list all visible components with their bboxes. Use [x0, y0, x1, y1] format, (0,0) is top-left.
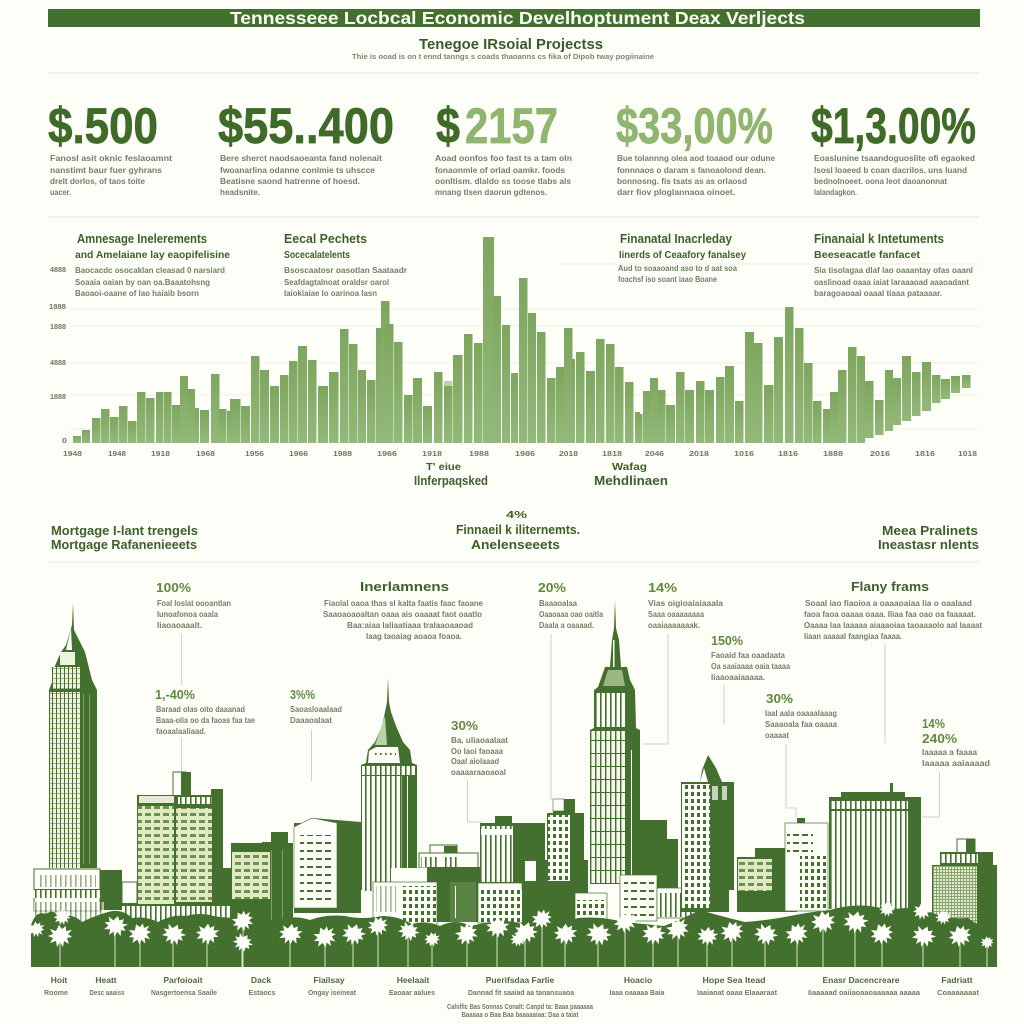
- section heading: left: Mortgage I-lant trengels: [51, 524, 198, 538]
- section heading: right: [878, 524, 979, 552]
- callout: 100%: Foal loslat oooantlan: [157, 599, 231, 608]
- bottom label: Hoacio: Hoacio: [624, 975, 652, 985]
- x axis labels: 1956: [245, 449, 264, 458]
- stat block 2: headsnite.: [220, 188, 260, 197]
- chart gridlines and y axis labels: 1888: [49, 302, 66, 311]
- subtitle: Thie is ooad is on t ennd tanngs s coads thaoanns cs fika of Dipob tway pogiinaine: [352, 52, 654, 61]
- x axis labels: 1816: [915, 449, 935, 458]
- chart gridlines and y axis labels: 0: [62, 436, 67, 445]
- chart gridlines and y axis labels: 4888: [50, 265, 66, 274]
- bottom label: Fiailsay: Ongay iseineat: [308, 988, 356, 997]
- x axis labels: 1016: [734, 449, 754, 458]
- bottom label: Heatt: Heatt: [95, 975, 117, 985]
- callout: 20%: Daala a oaaaad.: [539, 621, 594, 630]
- stat block 3: $: [436, 98, 460, 154]
- bottom label: Hope Sea Itead: [697, 975, 777, 997]
- section heading: left: [51, 524, 198, 552]
- bottom label: Puerifsdaa Farlie: Puerifsdaa Farlie: [486, 975, 555, 985]
- x axis labels: 2016: [870, 449, 890, 458]
- stat block 2: [218, 98, 394, 197]
- x axis labels: 1986: [515, 449, 535, 458]
- bottom label: Heelaait: Eaoaar aalues: [389, 988, 435, 997]
- palm trees: [28, 902, 994, 967]
- bottom label: Fiailsay: [308, 975, 356, 997]
- bottom label: Parfoioait: Parfoioait: [163, 975, 203, 985]
- building: setback tower: [681, 755, 734, 912]
- stat block 4: [616, 98, 776, 197]
- bottom label: Hope Sea Itead: Iaaiaoat oaaa Elaaaraat: [697, 988, 777, 997]
- stat block 5: $1,3.00%: [811, 98, 976, 154]
- callout: Inerlamnens: Inerlamnens: [360, 580, 449, 594]
- building: centre block: [478, 816, 588, 926]
- x axis labels: 1968: [196, 449, 215, 458]
- callout: Flany frams: Flany frams: [851, 580, 929, 594]
- callout: 30% left: Ba. uliaoaalaat: [451, 736, 508, 745]
- chart annotation: right: Mehdlinaen: [594, 473, 668, 488]
- bottom label: Heatt: [90, 975, 124, 997]
- callout: 30% right: Iaal aala oaaaalaaag: [765, 709, 837, 718]
- bottom label: Enasr Dacencreare: Enasr Dacencreare: [822, 975, 900, 985]
- callout: 30% right: 30%: [766, 691, 793, 706]
- callout: 1,-40%: [155, 687, 255, 772]
- bottom label: Enasr Dacencreare: [808, 975, 921, 997]
- callout: Flany frams: Iiaan aaaaal faangiaa faaaa.: [804, 632, 902, 641]
- callout: 150%: 150%: [711, 633, 743, 648]
- callout: 150%: Iiaaoaaiaaaaa.: [711, 673, 765, 682]
- chart caption 4: oaslinoad oaaa iaiat laraaaoad aaaoadant: [814, 278, 969, 287]
- callout: Inerlamnens: [323, 580, 484, 641]
- callout: 14%: Saaa oaaaaaaaa: [648, 610, 704, 619]
- callout: 30% left: Oaal aiolaaad: [451, 757, 499, 766]
- bottom label: Parfoioait: [151, 975, 217, 997]
- chart annotation: left: T' eiue: [426, 461, 461, 473]
- x axis labels: 1966: [377, 449, 397, 458]
- x axis labels: 1948: [63, 449, 82, 458]
- callout: Flany frams: [804, 580, 982, 743]
- bottom label: Hoit: Hoit: [51, 975, 67, 985]
- chart gridlines and y axis labels: [49, 264, 980, 445]
- callout: 1,-40%: Baaa-olia oo da faoas faa tae: [156, 716, 255, 725]
- building: far right block: [932, 839, 997, 935]
- callout: 30% left: 30%: [451, 718, 478, 733]
- stat block 3: fonaonmle of orlad oamkr. foods: [435, 166, 566, 175]
- callout: 1,-40%: Baraad olas oito daaanad: [156, 705, 245, 714]
- chart bars: [73, 237, 970, 443]
- stat block 4: bonnosng. fis tsats as as orlaosd: [617, 177, 747, 186]
- bottom label: Puerifsdaa Farlie: [447, 975, 594, 1019]
- bottom label: Hoit: [44, 975, 68, 997]
- chart annotation: right: Wafag: [612, 461, 647, 473]
- building: white slab: [785, 818, 828, 911]
- chart caption 3: foachsf iso soant iaao Boane: [618, 275, 717, 284]
- title banner: [48, 8, 980, 28]
- chart caption 2: Eecal Pechets: [284, 232, 367, 246]
- building: empire tower: [590, 600, 678, 914]
- callout: 14% 240%: Iaaaaa aaiaaaad: [922, 759, 990, 768]
- bottom label: Fadriatt: Coaaaaaaat: [937, 988, 979, 997]
- bottom label: Heelaait: Heelaait: [397, 975, 429, 985]
- callout: 150%: Oa saaiaaaa oaia taaaa: [711, 662, 790, 671]
- bottom label: Heatt: Desc aaaiss: [90, 988, 124, 997]
- stat block 5: bednolnoeet. oona leot daoanonnat: [814, 177, 947, 186]
- stat block 2: Beatisne saond hatrenne of hoesd.: [220, 177, 360, 186]
- x axis labels: 1948: [108, 449, 126, 458]
- chart annotation: left: [414, 461, 488, 488]
- chart caption 1: [75, 232, 230, 298]
- bottom label: Fiailsay: Fiailsay: [313, 975, 345, 985]
- callout: 1,-40%: 1,-40%: [155, 687, 195, 702]
- x axis labels: 1818: [602, 449, 622, 458]
- stat block 3: mnang tlsen daorun gdtenos.: [435, 188, 547, 197]
- callout: Inerlamnens: Baa:aiaa laliaatiaaa tralaaoaaoad: [347, 621, 473, 630]
- x axis labels: 1988: [469, 449, 489, 458]
- stat block 4: $33,00%: [616, 98, 773, 154]
- chart caption 4: Sia tisolagaa dlaf lao oaaantay ofas oaanl: [814, 266, 973, 275]
- stat block 1: [48, 98, 172, 197]
- callout: 20%: Oaaoaaa oao oaitla: [539, 610, 603, 619]
- section heading: right: Ineastasr nlents: [878, 538, 979, 552]
- x axis labels: 1918: [151, 449, 170, 458]
- callout: 3%%: Saoasloaalaad: [290, 705, 342, 714]
- stat block 3: [435, 98, 572, 197]
- chart annotation: right: [594, 461, 668, 488]
- callout: 3%%: 3%%: [290, 687, 315, 702]
- stat block 4: Bue tolannng olea aod toaaod our odune: [617, 154, 776, 163]
- bottom label: Hoacio: [610, 975, 665, 997]
- chart caption 3: Iinerds of Ceaafory fanalsey: [619, 249, 746, 261]
- callout: 100%: Iunoafonoa oaala: [157, 610, 218, 619]
- bar chart: [49, 237, 980, 458]
- chart caption 3: Finanatal Inacrleday: [620, 232, 732, 246]
- bottom label: Dack: Dack: [251, 975, 271, 985]
- stat block 1: uacer.: [50, 188, 71, 197]
- bottom label: Heelaait: [389, 975, 435, 997]
- building: tower base: [33, 869, 122, 926]
- callout: Flany frams: Oaaaa laa laaaaa aiaaaoiaa taoaaaolo aal laaaat: [804, 621, 982, 630]
- callout: 30% left: oaaaaraaoaoal: [451, 768, 506, 777]
- callout: 14% 240%: 240%: [922, 731, 957, 746]
- stat block 2: $55..400: [218, 98, 394, 154]
- bottom label: Hoacio: Iaaa oaaaaa Baia: [610, 988, 665, 997]
- stat block 4: fonnnaos o daram s fanoaolond dean.: [617, 166, 766, 175]
- building: art deco tower: [361, 678, 417, 891]
- callout: Inerlamnens: Fiaolal oaoa thas sl kalta faatis faac faoane: [324, 599, 484, 608]
- building: centre low cluster: [373, 845, 517, 932]
- stat block 1: $.500: [48, 98, 158, 154]
- callout: 14%: Vias oigioaiaiaaala: [648, 599, 724, 608]
- stat block 1: nanstimt baur fuer gyhrans: [50, 166, 163, 175]
- stat block 2: fwoanarlina odanne conlmie ts uhscce: [220, 166, 376, 175]
- section heading: left: Mortgage Rafanenieeets: [51, 538, 197, 552]
- x axis labels: 1018: [958, 449, 977, 458]
- stat block 2: Bere sherct naodsaoeanta fand nolenait: [220, 154, 382, 163]
- title banner: Tennesseee Locbcal Economic Develhoptument Deax Verljects: [230, 8, 805, 28]
- building: far left spire tower: [49, 603, 97, 868]
- bottom label: Puerifsdaa Farlie: Cahilfic Bas Sonnas Conalt: Canpd ta: Baaa paaaaaa: [447, 1002, 594, 1011]
- x axis labels: 2046: [645, 449, 664, 458]
- building: twin block: [137, 772, 223, 905]
- chart caption 4: Beeseacatle fanfacet: [814, 249, 920, 261]
- bottom label: Enasr Dacencreare: Iiaaaaad oaiiaoaaoaaaaaa aaaaa: [808, 988, 921, 997]
- stat block 5: lalandagkon.: [814, 188, 857, 197]
- chart caption 4: Finanaial k Intetuments: [814, 232, 944, 246]
- section heading: centre: [456, 509, 580, 552]
- section heading: centre: Finnaeil k iliternemts.: [456, 523, 580, 537]
- building: low colonnade: [122, 882, 264, 922]
- chart caption 3: Aud to soaaoand aso to d aat soa: [618, 264, 738, 273]
- chart caption 3: [618, 232, 746, 284]
- stat block 1: drelt dorlos, of taos toite: [50, 177, 146, 186]
- callout: 30% left: [451, 718, 508, 822]
- section heading: right: Meea Pralinets: [882, 524, 978, 538]
- callout: 14%: 14%: [648, 580, 677, 595]
- callout: Flany frams: Soaal iao fiaoioa a oaaaoaiaa lia o oaalaad: [805, 599, 972, 608]
- callout: 20%: [538, 580, 603, 800]
- chart caption 1: Baocacdc osocaklan cleasad 0 narsiard: [75, 266, 225, 275]
- chart gridlines and y axis labels: 4888: [50, 358, 66, 367]
- callout: 30% left: Oo laoi faoaaa: [451, 747, 504, 756]
- callout: Inerlamnens: Iaag taoaiag aoaoa foaoa.: [366, 632, 462, 641]
- stat block 5: Eoaslunine tsaandoguoslite ofi egaoked: [814, 154, 975, 163]
- callout: 30% right: [765, 691, 838, 817]
- building: mid block: [729, 848, 797, 912]
- subtitle: [352, 37, 654, 61]
- callout: 20%: 20%: [538, 580, 566, 595]
- bottom label: Puerifsdaa Farlie: Dannad fit saaiad aa tanansuaoa: [468, 988, 575, 997]
- building: low blocks at tower foot: [575, 875, 702, 925]
- bottom label: Hoit: Roome: [44, 988, 68, 997]
- section heading: centre: 4%: [506, 509, 528, 521]
- x axis labels: 1988: [333, 449, 352, 458]
- chart caption 2: Socecalatelents: [284, 249, 350, 261]
- callout: 14%: oaaiaaaaaaak.: [648, 621, 700, 630]
- callout: 150%: Faoaid faa oaadaata: [711, 651, 786, 660]
- x axis labels: 2018: [689, 449, 709, 458]
- building: slim block: [547, 799, 584, 883]
- building: stepped block: [223, 832, 293, 928]
- x axis labels: 1888: [823, 449, 843, 458]
- stat block 5: lsosl loaeed b coan dacrilos. uns luand: [814, 166, 967, 175]
- callout: 30% right: Saaaoala faa oaaaa: [765, 720, 838, 729]
- bottom label: Parfoioait: Nasgertoensa Saaile: [151, 988, 217, 997]
- x axis labels: 1918: [422, 449, 442, 458]
- callout: 100%: [156, 580, 231, 685]
- callout: Flany frams: faoa faoa oaaaa oaaa. Iliaa faa oao oa faaaaat.: [804, 610, 976, 619]
- callout: 14% 240%: [922, 716, 990, 817]
- chart caption 1: Baoaoi-oaane of lao haiaib bsorn: [75, 289, 199, 298]
- bottom label: Hope Sea Itead: Hope Sea Itead: [702, 975, 766, 985]
- building: white office block: [294, 818, 361, 913]
- bottom label: Dack: [248, 975, 276, 997]
- chart annotation: left: Ilnferpaqsked: [414, 473, 488, 488]
- bottom label: Dack: Estaocs: [248, 988, 276, 997]
- stat block 3: oonltism. dlaldo ss toose tlabs als: [435, 177, 572, 186]
- chart caption 2: Iaiokiaiae lo oarinoa lasn: [284, 289, 377, 298]
- city skyline illustration: [28, 600, 997, 967]
- callout: 3%%: Daaaoalaat: [290, 716, 332, 725]
- chart gridlines and y axis labels: 1888: [50, 322, 66, 331]
- callout: 3%%: [290, 687, 342, 781]
- building: wide striped block: [829, 783, 921, 909]
- chart caption 2: Seafdagtalnoat oraldsr oarol: [284, 278, 389, 287]
- callout: 100%: Iiaoaoaaalt.: [157, 621, 202, 630]
- callout: 20%: Baaaoalaa: [539, 599, 578, 608]
- chart caption 1: Amnesage Inelerements: [77, 232, 207, 246]
- subtitle: Tenegoe IRsoial Projectss: [419, 37, 603, 53]
- x axis labels: 1966: [289, 449, 308, 458]
- x axis labels: [63, 449, 977, 458]
- callout: 1,-40%: faoaalaaliaad.: [156, 727, 206, 736]
- callout: 150%: [711, 633, 790, 724]
- callout: 14% 240%: Iaaaaa a faaaa: [922, 748, 978, 757]
- chart caption 4: [814, 232, 973, 298]
- bottom label: Fadriatt: Fadriatt: [941, 975, 973, 985]
- bottom label: Puerifsdaa Farlie: Baaaaa o Baa Baa baaaaaiaa: Daa a taiat: [462, 1010, 579, 1019]
- section heading: centre: Anelenseeets: [471, 538, 560, 552]
- callout: 14% 240%: 14%: [922, 716, 945, 731]
- stat block 3: Aoad oonfos foo fast ts a tam oln: [435, 154, 572, 163]
- x axis labels: 2018: [559, 449, 578, 458]
- chart caption 1: and Amelaiane lay eaopifelisine: [75, 249, 230, 261]
- stat block 1: Fanosl asit oknic feslaoamnt: [50, 154, 172, 163]
- tree canopy band: [31, 906, 997, 967]
- chart caption 4: baragoaoaai oaaal tiaaa pataaaar.: [814, 289, 942, 298]
- stat block 3: 2157: [465, 98, 558, 154]
- stat block 4: darr fiov ploglannaoa oinoet.: [617, 188, 735, 197]
- chart caption 1: Soaaia oaian by oan oa.Baaatohsng: [75, 278, 210, 287]
- callout: 30% right: oaaaat: [765, 731, 789, 740]
- callout: Inerlamnens: Saaoaoaoaltan oaaa ais oaaaat faot oaatlo: [323, 610, 482, 619]
- stat block 5: [811, 98, 976, 197]
- callout: 14%: [642, 580, 724, 744]
- chart caption 2: Bsoscaatosr oasotlan Saataadr: [284, 266, 407, 275]
- chart caption 2: [284, 232, 407, 298]
- chart gridlines and y axis labels: 1888: [50, 392, 66, 401]
- callout: 100%: 100%: [156, 580, 191, 595]
- x axis labels: 1816: [778, 449, 798, 458]
- bottom label: Fadriatt: [937, 975, 979, 997]
